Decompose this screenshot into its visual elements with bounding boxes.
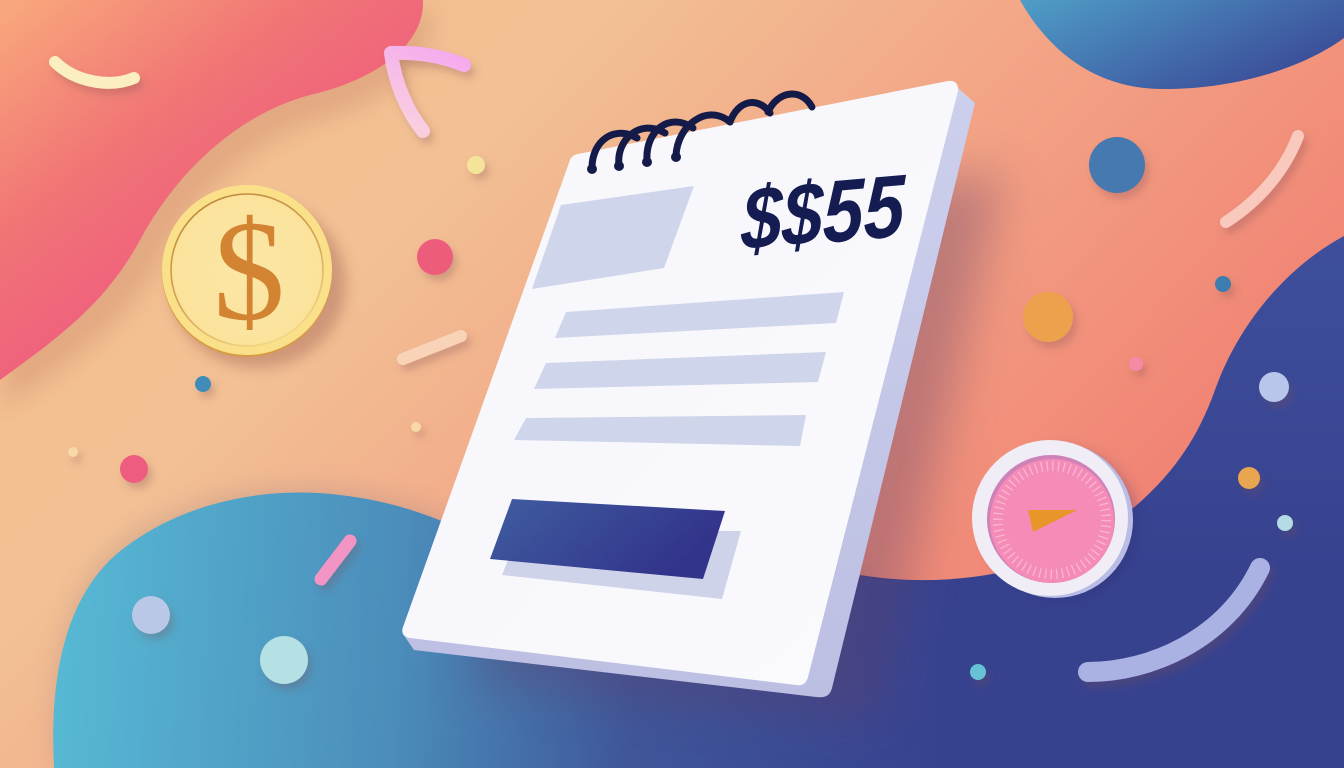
coin <box>162 185 346 368</box>
text line 2 <box>534 352 826 389</box>
document side edge <box>403 81 975 697</box>
blob: right navy <box>800 236 1344 768</box>
blob: bottom wave <box>53 487 1100 768</box>
spiral binding <box>590 94 812 172</box>
document <box>402 81 975 697</box>
peach stroke right <box>1226 136 1298 222</box>
cream stroke <box>55 62 134 83</box>
price: $$55 <box>740 156 907 270</box>
blob: top right <box>1020 0 1344 89</box>
pink arc <box>391 53 464 131</box>
image placeholder <box>532 186 694 289</box>
lavender arc <box>1088 568 1260 672</box>
pink dash <box>321 541 350 579</box>
document shadow <box>468 172 1003 722</box>
button shadow <box>502 530 741 599</box>
decor: shapes <box>55 53 1298 672</box>
gauge needle <box>1028 510 1077 532</box>
peach dash <box>403 336 461 359</box>
document page <box>402 81 958 685</box>
decor: dots <box>68 137 1293 684</box>
coin dollar sign: $ <box>213 192 285 351</box>
blob: top left <box>0 0 434 410</box>
text line 3 <box>514 415 806 446</box>
text line 1 <box>555 292 844 338</box>
gauge <box>972 440 1137 600</box>
button <box>490 499 725 579</box>
